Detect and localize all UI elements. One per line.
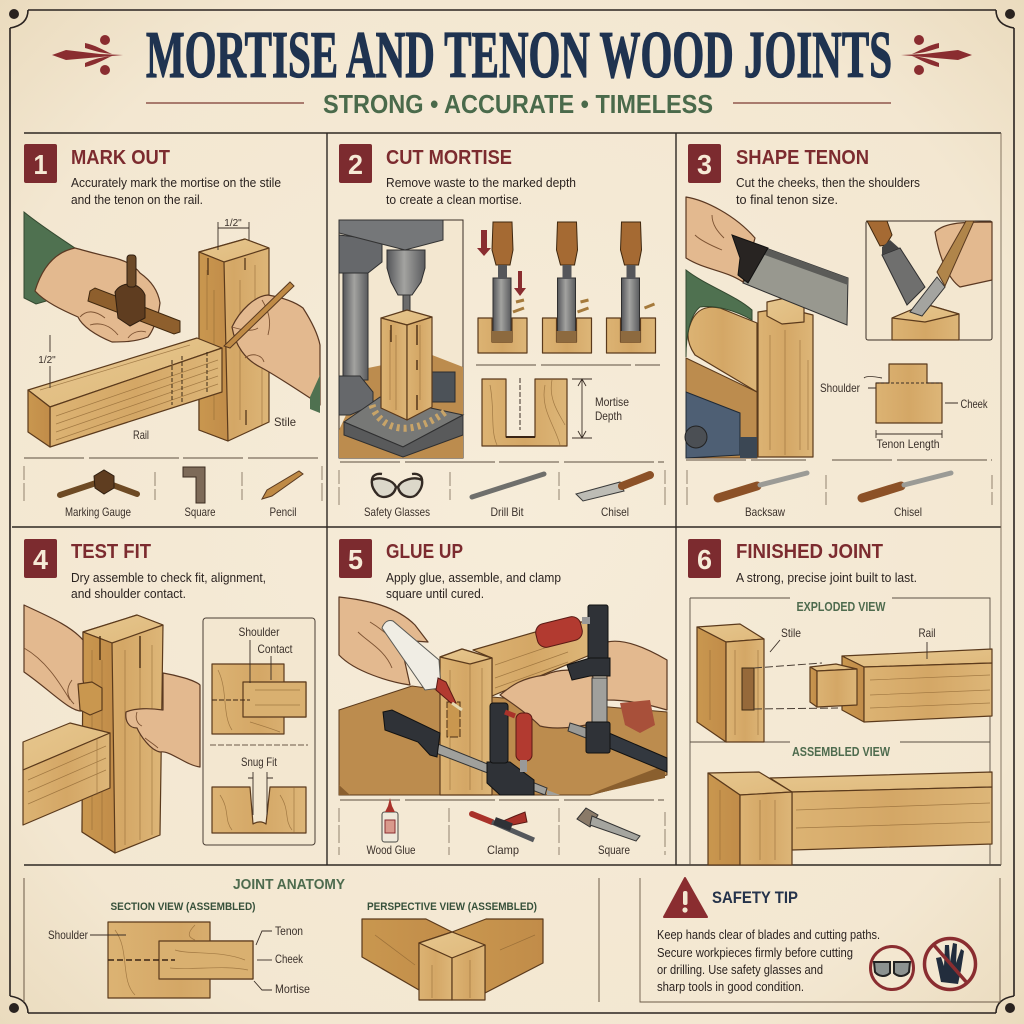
near clamp (383, 703, 560, 795)
subtitle: STRONG • ACCURATE • TIMELESS (323, 89, 713, 119)
step number 5: 5 (348, 544, 363, 575)
panel 5: glue up (339, 539, 667, 857)
heading: CUT MORTISE (386, 147, 512, 169)
chisel step b (542, 222, 592, 353)
panel 3: shape tenon (685, 144, 992, 519)
tool: chisel (576, 475, 650, 501)
label drill bit: Drill Bit (490, 505, 524, 519)
heading: TEST FIT (71, 541, 151, 563)
left hand (24, 605, 102, 715)
description: Dry assemble to check fit, alignment, (71, 570, 266, 585)
description: A strong, precise joint built to last. (736, 570, 917, 585)
snug fit diagram (212, 772, 306, 833)
inset chisel detail (866, 221, 992, 340)
step number 4: 4 (33, 544, 48, 575)
illustration: bench and vise (685, 358, 757, 458)
label cheek: Cheek (960, 397, 988, 411)
drill press illustration (339, 220, 463, 458)
side dimension (38, 335, 56, 388)
tool: pencil (262, 471, 303, 499)
description (71, 175, 281, 207)
step number 1 (24, 144, 57, 183)
step number 4 (24, 539, 57, 578)
label stile: Stile (781, 626, 801, 640)
label wood glue: Wood Glue (366, 843, 416, 857)
chisel step c (606, 222, 656, 353)
tool: chisel (862, 473, 951, 498)
dimension 1/2 inch: 1/2" (224, 218, 242, 229)
description: and shoulder contact. (71, 586, 186, 601)
step number 2 (339, 144, 372, 183)
label clamp: Clamp (487, 843, 519, 857)
description (386, 570, 561, 601)
label rail: Rail (133, 428, 149, 442)
arrow down b (514, 271, 526, 296)
label square: Square (598, 843, 630, 857)
label mortise (254, 981, 310, 996)
label mortise: Mortise (275, 982, 310, 996)
icon: safety glasses (870, 946, 914, 990)
label rail: Rail (918, 626, 936, 640)
label shoulder: Shoulder (238, 625, 280, 639)
label square: Square (184, 505, 216, 519)
green sleeve (686, 270, 752, 357)
view frames (690, 598, 990, 865)
heading assembled view: ASSEMBLED VIEW (792, 744, 891, 759)
exploded: stile (697, 624, 764, 742)
tool: square (183, 467, 205, 503)
safety text: sharp tools in good condition. (657, 979, 804, 994)
step number 6: 6 (697, 544, 712, 575)
right hand (607, 641, 667, 710)
label mortise depth: Depth (595, 409, 622, 423)
mortise depth section (482, 378, 592, 446)
panel 4: test fit (23, 539, 315, 853)
step number 5 (339, 539, 372, 578)
label contact: Contact (258, 642, 293, 656)
perspective view diagram (362, 919, 543, 1000)
step number 2: 2 (348, 149, 363, 180)
panel 2: cut mortise (339, 144, 665, 519)
safety text: or drilling. Use safety glasses and (657, 962, 823, 977)
illustration: post (82, 615, 163, 853)
illustration: rail (23, 723, 110, 825)
label cheek (257, 952, 304, 966)
heading: FINISHED JOINT (736, 541, 883, 563)
label safety glasses: Safety Glasses (364, 505, 430, 519)
side dimension: 1/2" (38, 355, 56, 366)
description: Accurately mark the mortise on the stile (71, 175, 281, 190)
tool: safety glasses (372, 474, 422, 497)
safety text: Secure workpieces firmly before cutting (657, 945, 853, 960)
step number 1: 1 (34, 149, 48, 180)
hand and backsaw (686, 197, 848, 325)
label shoulder: Shoulder (820, 381, 860, 395)
section view diagram (108, 922, 253, 998)
panel: joint anatomy (24, 877, 599, 1002)
heading joint anatomy: JOINT ANATOMY (233, 877, 345, 893)
subtitle rules (146, 102, 891, 104)
step number 6 (688, 539, 721, 578)
assembled: stile (708, 772, 792, 865)
label cheek: Cheek (275, 952, 304, 966)
arrow down a (477, 230, 491, 256)
label tenon: Tenon (275, 924, 303, 938)
label tenon (256, 924, 303, 945)
safety text (657, 927, 880, 994)
panel: safety tip (640, 878, 1000, 1002)
icon: no hands (924, 938, 976, 990)
red rag (620, 700, 655, 733)
icon: warning triangle (664, 878, 707, 917)
glue hand and bottle (339, 597, 462, 710)
heading perspective view: PERSPECTIVE VIEW (ASSEMBLED) (367, 901, 537, 913)
label stile: Stile (274, 415, 296, 429)
label rail (918, 626, 936, 659)
panel 6: finished joint (688, 539, 992, 865)
label backsaw: Backsaw (745, 505, 785, 519)
safety text: Keep hands clear of blades and cutting paths. (657, 927, 880, 942)
shoulder contact diagram (212, 640, 306, 734)
description: Apply glue, assemble, and clamp (386, 570, 561, 585)
label chisel: Chisel (601, 505, 629, 519)
heading: SHAPE TENON (736, 147, 869, 169)
description (71, 570, 266, 601)
tool: marking gauge (60, 470, 137, 495)
tool: square (577, 808, 640, 841)
lower hand (500, 670, 600, 728)
tool: clamp (472, 812, 534, 840)
description: and the tenon on the rail. (71, 192, 203, 207)
glue-up illustration (339, 597, 667, 795)
heading: GLUE UP (386, 541, 463, 563)
step number 3 (688, 144, 721, 183)
chisel step a (478, 222, 527, 353)
heading exploded view: EXPLODED VIEW (796, 599, 886, 614)
label mortise depth (595, 395, 629, 423)
heading: MARK OUT (71, 147, 170, 169)
dimension 1/2 inch (218, 218, 249, 250)
heading safety tip: SAFETY TIP (712, 888, 798, 907)
bench (339, 686, 667, 795)
right hand (126, 673, 200, 767)
far clamp (534, 605, 667, 772)
label marking gauge: Marking Gauge (65, 505, 131, 519)
description: to final tenon size. (736, 192, 838, 207)
label pencil: Pencil (270, 505, 296, 519)
step number 3: 3 (697, 149, 712, 180)
exploded: guide lines (754, 663, 838, 709)
label mortise depth: Mortise (595, 395, 629, 409)
inset box (203, 618, 315, 845)
description (386, 175, 576, 207)
label shoulder (48, 928, 126, 942)
tool: backsaw (718, 473, 807, 498)
description: Remove waste to the marked depth (386, 175, 576, 190)
label stile (770, 626, 801, 652)
left hand with marking gauge (35, 248, 180, 342)
description (736, 175, 920, 207)
tenon diagram (864, 364, 958, 438)
illustration: rail (28, 338, 222, 447)
description: square until cured. (386, 586, 484, 601)
panel 1: mark out (24, 144, 322, 519)
label snug fit: Snug Fit (241, 755, 278, 769)
label shoulder: Shoulder (48, 928, 88, 942)
exploded: rail with tenon (810, 649, 992, 722)
panel grid lines (12, 133, 1001, 865)
illustration: rail (688, 307, 757, 392)
description: to create a clean mortise. (386, 192, 522, 207)
illustration: stile post (199, 239, 269, 441)
post (440, 649, 492, 795)
description: Cut the cheeks, then the shoulders (736, 175, 920, 190)
left sleeve (24, 212, 75, 304)
pencil hand (224, 282, 320, 413)
assembled: rail (770, 772, 992, 850)
label chisel: Chisel (894, 505, 922, 519)
label tenon length: Tenon Length (876, 437, 940, 451)
ornament left (52, 35, 123, 75)
illustration: post with tenon (758, 297, 813, 457)
tool: wood glue (382, 798, 398, 842)
heading section view: SECTION VIEW (ASSEMBLED) (110, 901, 256, 913)
tool: drill bit (472, 474, 544, 497)
ornament right (901, 35, 972, 75)
rail (473, 622, 590, 696)
